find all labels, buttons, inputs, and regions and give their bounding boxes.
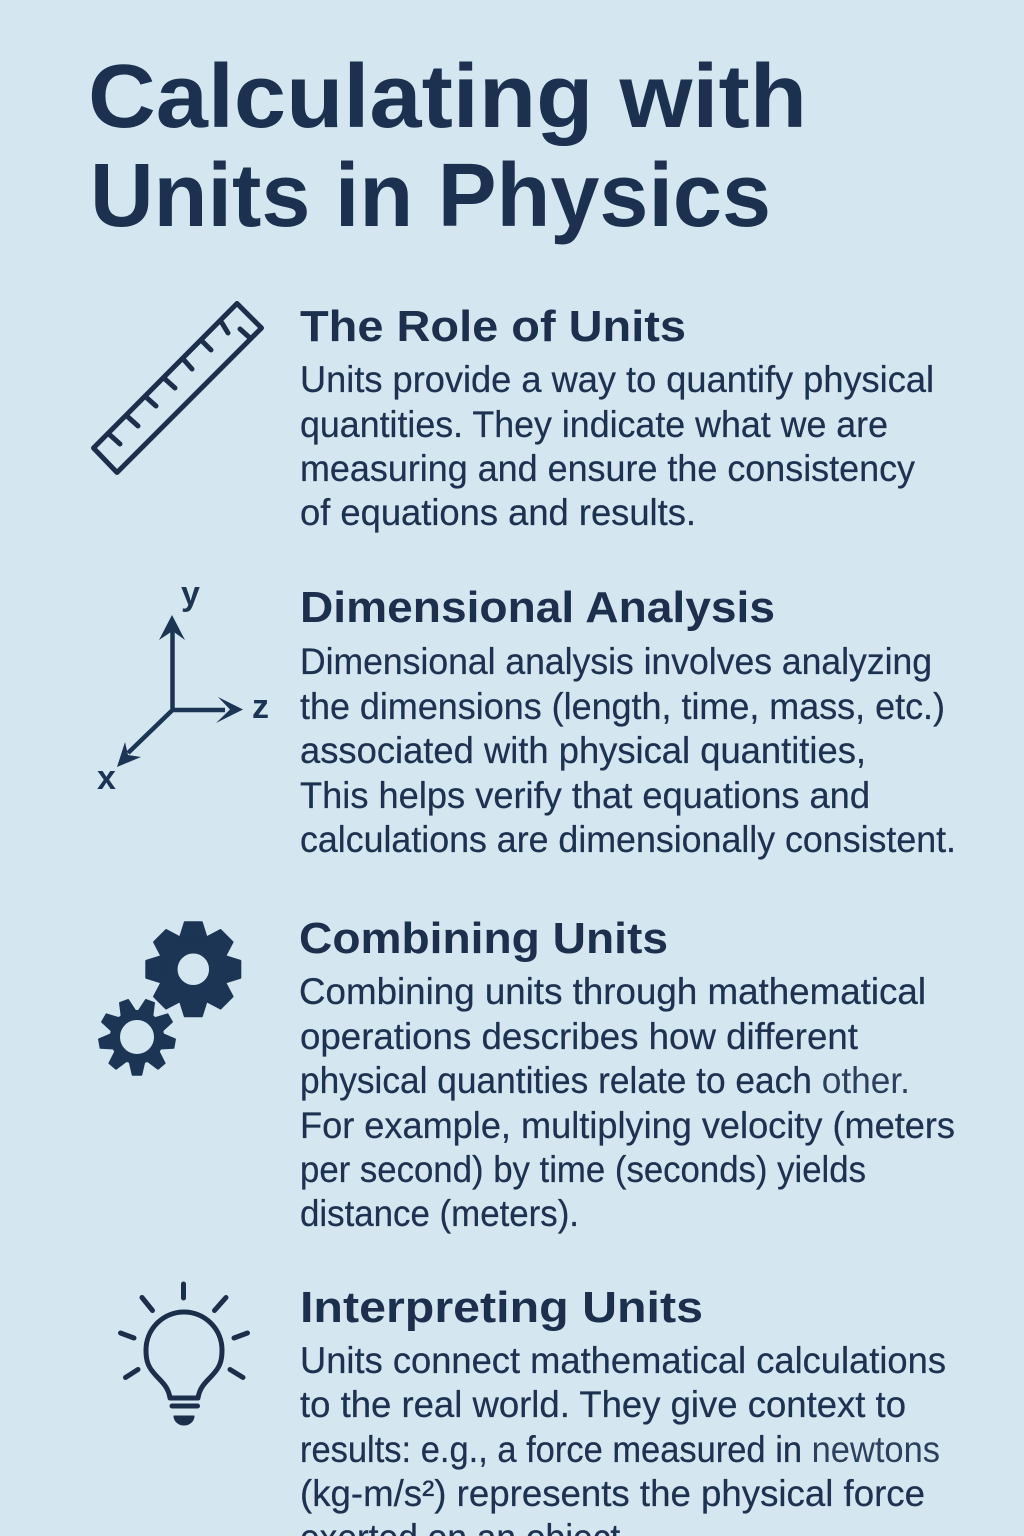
text block: interpreting units: Units connect mathematical calculations — [300, 1340, 946, 1381]
icon: xyz axes — [97, 575, 269, 797]
text block: dimensional analysis: the dimensions (length, time, mass, etc.) — [300, 686, 945, 727]
text block: combining units: distance (meters). — [300, 1193, 579, 1234]
icon: xyz axes: z — [252, 688, 269, 726]
text block: interpreting units: to the real world. They give context to — [300, 1384, 906, 1425]
panel: the role of units — [94, 302, 934, 533]
heading: interpreting units: Interpreting Units — [300, 1283, 703, 1332]
panel: dimensional analysis — [97, 575, 956, 860]
icon: xyz axes: y — [181, 575, 200, 613]
title: Units in Physics — [90, 146, 771, 246]
text block: the role of units: of equations and results. — [300, 492, 696, 533]
text block: combining units: Combining units through mathematical — [299, 971, 926, 1012]
heading: dimensional analysis: Dimensional Analysis — [300, 583, 775, 632]
text block: the role of units — [300, 359, 934, 533]
icon: ruler — [94, 304, 262, 472]
panel: interpreting units — [120, 1283, 946, 1536]
text block: dimensional analysis: calculations are dimensionally consistent. — [300, 819, 956, 860]
title — [88, 47, 807, 246]
text block: combining units: For example, multiplying velocity (meters — [300, 1105, 955, 1146]
icon: xyz axes: x — [97, 759, 116, 797]
title: Calculating with — [88, 47, 807, 147]
text block: interpreting units: results: e.g., a force measured in newtons — [300, 1429, 940, 1470]
text block: the role of units: quantities. They indicate what we are — [300, 404, 888, 445]
text block: dimensional analysis: associated with physical quantities, — [300, 730, 866, 771]
icon: light bulb — [120, 1284, 248, 1425]
text block: combining units — [299, 971, 955, 1234]
text block: the role of units: measuring and ensure the consistency — [300, 448, 915, 489]
text block: dimensional analysis: Dimensional analysis involves analyzing — [300, 641, 932, 682]
text block: combining units: per second) by time (seconds) yields — [300, 1149, 866, 1190]
text block: dimensional analysis: This helps verify that equations and — [300, 775, 870, 816]
text block: interpreting units: (kg-m/s²) represents the physical force — [300, 1473, 925, 1514]
text block: combining units: physical quantities relate to each other. — [300, 1060, 910, 1101]
heading: combining units: Combining Units — [299, 914, 668, 963]
icon: gears — [98, 922, 240, 1075]
text block: dimensional analysis — [300, 641, 956, 860]
text block: interpreting units — [300, 1340, 946, 1536]
heading: the role of units: The Role of Units — [300, 302, 686, 351]
text block: combining units: operations describes how different — [300, 1016, 859, 1057]
text block: the role of units: Units provide a way to quantify physical — [300, 359, 934, 400]
panel: combining units — [98, 914, 955, 1234]
